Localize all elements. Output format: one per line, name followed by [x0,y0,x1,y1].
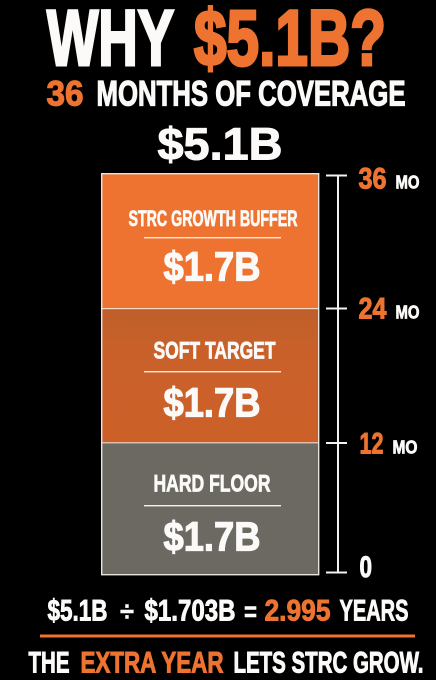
panel: soft target: SOFT TARGET [154,338,276,364]
formula: $1.703B [144,594,236,628]
closing statement: EXTRA YEAR [80,646,224,680]
panel: hard floor: $1.7B [164,514,260,560]
label: 36 months [358,162,420,196]
label: 36 months: MO [396,172,420,192]
stacked bar [101,173,319,575]
formula [48,594,408,628]
total amount: $5.1B [158,118,282,170]
formula: $5.1B [48,594,108,628]
label: 12 months: 12 [360,428,384,460]
label: 24 months: MO [396,302,420,322]
label: 24 months [358,292,420,326]
panel: hard floor: HARD FLOOR [154,470,271,498]
panel: STRC growth buffer: STRC GROWTH BUFFER [128,206,298,231]
label: 36 months: 36 [358,162,386,196]
closing statement [28,646,424,680]
formula: ÷ [120,596,134,627]
title [47,0,386,82]
panel: STRC growth buffer: $1.7B [164,244,260,290]
panel: soft target: $1.7B [164,380,260,426]
subtitle: 36 [46,74,84,114]
label: 12 months: MO [392,436,418,458]
panel: hard floor [101,443,319,575]
formula: 2.995 [264,594,330,628]
closing statement: THE [28,646,70,680]
formula: = [244,596,257,627]
panel: STRC growth buffer [101,173,319,309]
panel: soft target [101,309,319,443]
divider rule [40,634,415,638]
label: 0: 0 [360,551,372,584]
label: 12 months [360,428,418,460]
timeline axis [326,162,420,584]
label: 24 months: 24 [358,292,387,326]
